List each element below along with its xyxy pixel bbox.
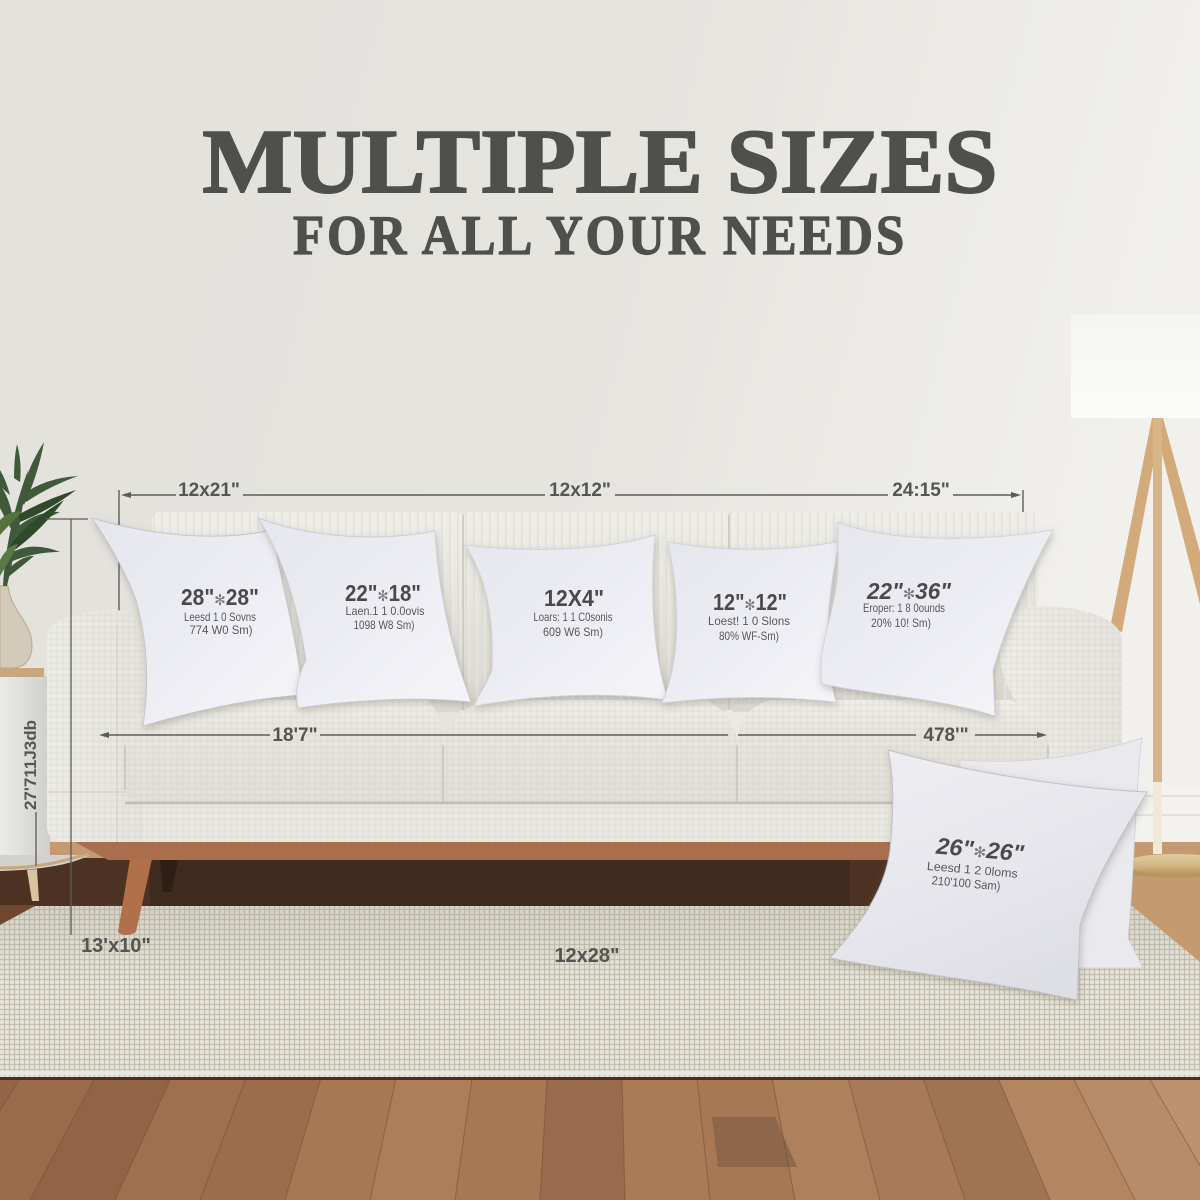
top dimension line: 24:15" <box>892 480 950 501</box>
front leg <box>118 859 152 935</box>
seat cushion centre <box>443 700 737 802</box>
pillow 5 label: 22"✻36" <box>866 578 952 604</box>
base <box>100 760 1085 842</box>
wall background <box>0 0 1200 900</box>
leaves <box>0 442 78 586</box>
lamp tripod legs <box>1110 418 1162 632</box>
floor behind sofa <box>0 842 1200 1002</box>
sofa wooden frame <box>75 842 910 860</box>
title <box>202 111 998 267</box>
lamp base <box>1122 854 1200 878</box>
pillow 4 <box>662 541 840 703</box>
pillow 1 label: 28"✻28" <box>181 584 259 610</box>
pillow 4 label <box>708 589 790 643</box>
back cushions <box>152 512 1038 712</box>
pillow 1 <box>92 518 303 726</box>
pillow front label: 210'100 Sam) <box>931 873 1001 893</box>
pillow 2 label: Laen.1 1 0.0ovis <box>346 604 424 618</box>
pillow front label <box>925 832 1026 895</box>
pillow 3 label <box>534 585 612 639</box>
pillow 5 <box>821 522 1053 716</box>
pillow 2 label: 22"✻18" <box>345 580 421 606</box>
rear leg <box>160 860 178 892</box>
top dimension line: 12x21" <box>178 480 240 501</box>
pillow 2 label: 1098 W8 Sm) <box>354 618 415 632</box>
pillow front label: 26"✻26" <box>934 833 1026 866</box>
pillow 1 label <box>181 584 259 637</box>
floor lamp <box>1071 315 1200 878</box>
sofa <box>47 512 1122 935</box>
pillow 3 label: 609 W6 Sm) <box>543 625 603 639</box>
pillow 4 label: Loest! 1 0 Slons <box>708 614 790 628</box>
vase <box>0 586 32 668</box>
middle dimension line: 18'7" <box>272 725 318 746</box>
pillow 1 label: 774 W0 Sm) <box>190 623 253 637</box>
left height dimension <box>21 519 88 935</box>
lamp shade <box>1071 315 1200 418</box>
bottom left dimension label: 13'x10" <box>81 935 151 957</box>
middle dimension line <box>99 725 1047 746</box>
pillow 1 label: Leesd 1 0 Sovns <box>184 610 256 624</box>
rug dimension label: 12x28" <box>554 945 620 967</box>
pillow 2 <box>258 518 471 708</box>
left arm <box>47 609 143 842</box>
dimension ticks <box>119 490 1023 612</box>
pillow front on floor <box>830 750 1147 1000</box>
middle dimension line: 478'" <box>923 725 969 746</box>
pillow 3 <box>465 535 668 706</box>
pillow 4 label: 80% WF-Sm) <box>719 629 779 643</box>
baseboard <box>1000 788 1200 844</box>
seat cushion right <box>737 700 1048 802</box>
pillow 4 label: 12"✻12" <box>713 589 787 615</box>
pillow 5 label <box>863 578 952 630</box>
rotated height label: 27'711J3db <box>21 720 40 810</box>
subtitle: FOR ALL YOUR NEEDS <box>293 205 907 267</box>
floor foreground <box>0 1077 1200 1200</box>
plant in vase <box>0 442 78 668</box>
pillow front label: Leesd 1 2 0loms <box>926 859 1018 881</box>
top dimension line: 12x12" <box>549 480 611 501</box>
pillow 2 label <box>345 580 424 632</box>
side table <box>0 668 90 901</box>
pillow 3 label: 12X4" <box>544 585 604 611</box>
rug <box>0 906 1200 1077</box>
pillow 5 label: 20% 10! Sm) <box>871 616 931 630</box>
pillow 3 label: Loars: 1 1 C0sonis <box>534 610 612 624</box>
pillow 5 label: Eroper: 1 8 0ounds <box>863 601 945 615</box>
pillow rear on floor <box>960 738 1143 968</box>
top dimension line <box>121 480 1021 501</box>
title: MULTIPLE SIZES <box>202 111 998 212</box>
right arm <box>1000 606 1122 842</box>
seat cushion left <box>125 700 443 802</box>
